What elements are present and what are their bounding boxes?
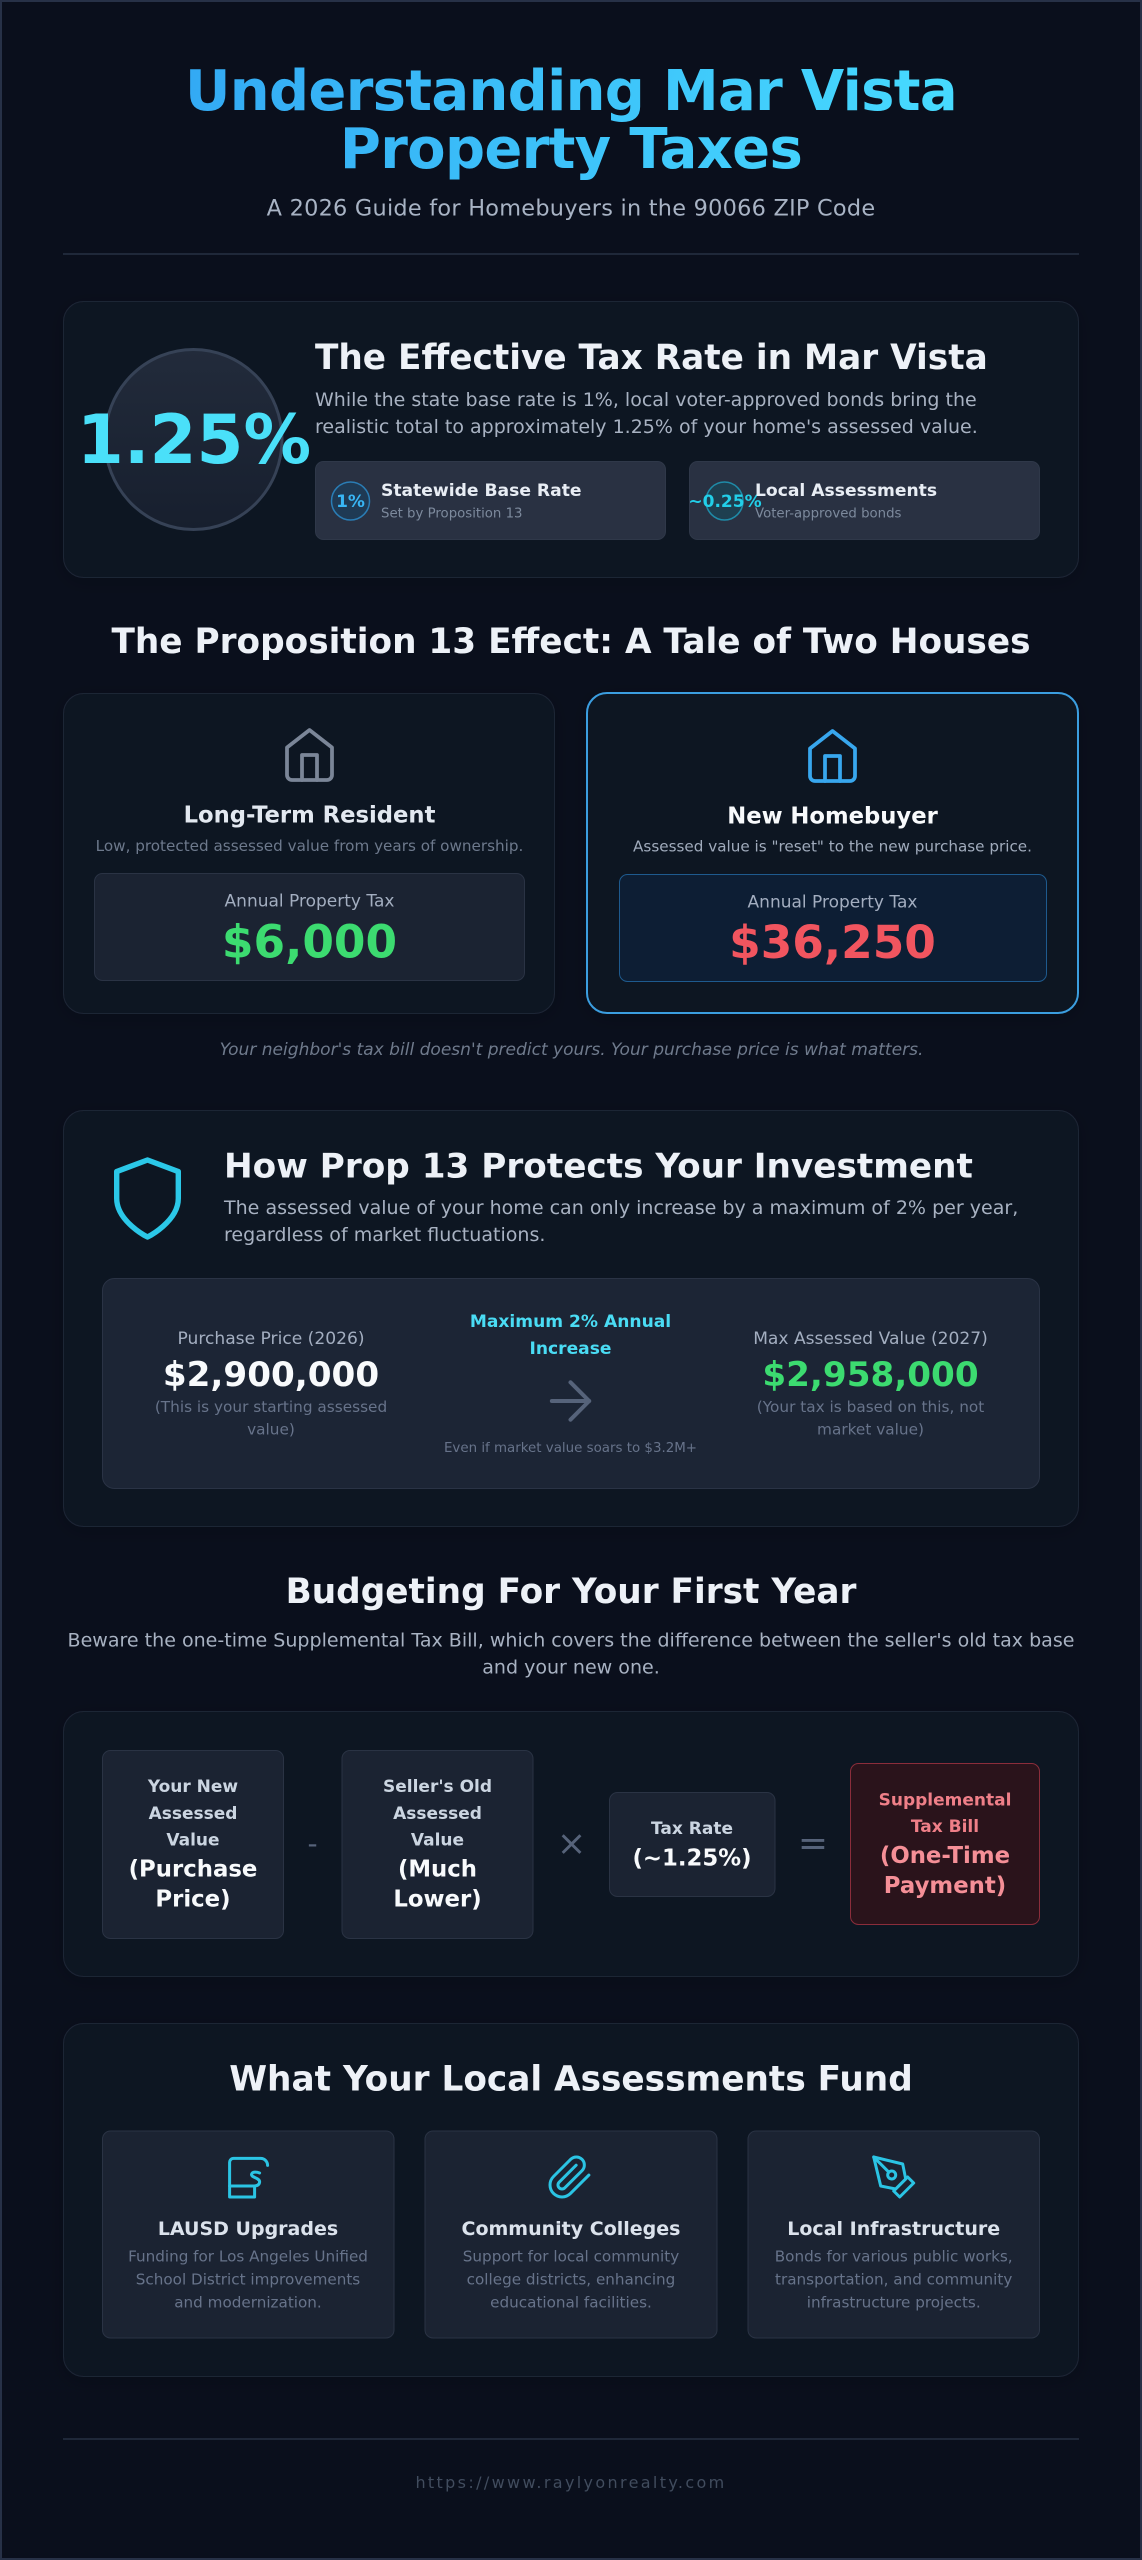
card: local infrastructure: infrastructure projects. <box>807 2293 981 2311</box>
tax amount box: Annual Property Tax <box>748 893 917 913</box>
box: old assessed value <box>342 1750 533 1938</box>
title: Understanding Mar Vista <box>185 59 957 124</box>
label: New Homebuyer <box>727 804 939 830</box>
icon: paperclip <box>548 2156 590 2198</box>
box: old assessed value: (Much <box>398 1857 477 1883</box>
box: old assessed value: Seller's Old <box>383 1777 492 1797</box>
card: statewide base rate: Set by Proposition 13 <box>381 506 523 522</box>
purchase price: (This is your starting assessed <box>155 1398 387 1416</box>
purchase price: value) <box>247 1420 295 1438</box>
purchase price: $2,900,000 <box>163 1355 379 1395</box>
minus operator: - <box>307 1827 318 1860</box>
budgeting description <box>68 1630 1074 1678</box>
box: new assessed value <box>102 1750 284 1938</box>
card: LAUSD upgrades: and modernization. <box>174 2293 322 2311</box>
annual increase: Maximum 2% Annual <box>470 1312 671 1332</box>
box: supplemental bill: (One-Time <box>880 1843 1010 1869</box>
max assessed value: $2,958,000 <box>762 1355 979 1395</box>
equals operator: = <box>798 1823 828 1864</box>
card: statewide base rate: 1% <box>336 492 365 512</box>
max assessed value: Max Assessed Value (2027) <box>753 1329 988 1349</box>
box: new assessed value: Assessed <box>149 1804 237 1824</box>
footer url: https://www.raylyonrealty.com <box>415 2473 727 2492</box>
box: supplemental bill: Tax Bill <box>911 1817 979 1837</box>
box: supplemental bill: Payment) <box>884 1873 1006 1899</box>
title <box>185 59 957 182</box>
card: LAUSD upgrades <box>102 2131 394 2338</box>
label: Long-Term Resident <box>184 803 436 829</box>
icon: scroll <box>228 2156 270 2198</box>
panel: supplemental formula <box>64 1712 1078 1976</box>
rate circle <box>77 350 311 530</box>
panel: effective tax rate <box>64 302 1078 578</box>
box: new assessed value: Value <box>166 1831 220 1851</box>
description: Assessed value is "reset" to the new purchase price. <box>633 838 1032 856</box>
box: supplemental bill <box>850 1764 1040 1924</box>
description: The assessed value of your home can only increase by a maximum of 2% per year, <box>223 1197 1018 1219</box>
heading: budgeting: Budgeting For Your First Year <box>286 1572 856 1612</box>
subtitle: A 2026 Guide for Homebuyers in the 90066 ZIP Code <box>267 196 875 222</box>
purchase price <box>155 1329 387 1438</box>
max assessed value: (Your tax is based on this, not <box>757 1398 984 1416</box>
box: new assessed value: (Purchase <box>129 1857 257 1883</box>
note: Your neighbor's tax bill doesn't predict yours. Your purchase price is what matters. <box>220 1040 923 1060</box>
header <box>63 59 1079 255</box>
box: old assessed value: Assessed <box>393 1804 482 1824</box>
card: community colleges: college districts, enhancing <box>467 2270 675 2288</box>
card: community colleges: educational facilities. <box>490 2293 652 2311</box>
icon: house <box>285 728 334 782</box>
description <box>315 389 978 438</box>
card: community colleges: Support for local community <box>463 2248 679 2266</box>
card: local assessments: ~0.25% <box>688 492 762 512</box>
box: new assessed value: Your New <box>147 1777 238 1797</box>
heading: proposition 13 effect: The Proposition 13 Effect: A Tale of Two Houses <box>111 622 1031 662</box>
max assessed value: market value) <box>817 1420 924 1438</box>
card: statewide base rate: Statewide Base Rate <box>381 481 582 501</box>
heading: How Prop 13 Protects Your Investment <box>224 1147 973 1187</box>
tax amount box: $36,250 <box>729 916 936 969</box>
box: old assessed value: Lower) <box>393 1887 482 1913</box>
icon: shield <box>114 1157 181 1240</box>
card: local infrastructure: transportation, and community <box>775 2270 1012 2288</box>
arrow <box>550 1380 592 1422</box>
card: community colleges <box>425 2131 717 2338</box>
card: community colleges: Community Colleges <box>462 2218 680 2240</box>
card: local assessments: Local Assessments <box>755 481 937 501</box>
description: While the state base rate is 1%, local voter-approved bonds bring the <box>315 389 977 411</box>
box: tax rate: (~1.25%) <box>632 1846 752 1872</box>
times operator: × <box>557 1824 586 1864</box>
icon: house <box>808 729 857 783</box>
panel: local assessments fund <box>64 2024 1078 2376</box>
purchase price: Purchase Price (2026) <box>177 1329 365 1349</box>
value comparison box <box>102 1278 1040 1488</box>
card: LAUSD upgrades: Funding for Los Angeles Unified <box>128 2248 368 2266</box>
box: old assessed value: Value <box>411 1831 464 1851</box>
card: local infrastructure: Local Infrastructure <box>787 2218 1000 2240</box>
card: statewide base rate <box>316 462 666 540</box>
card: local infrastructure <box>748 2131 1040 2338</box>
tax amount box <box>94 874 524 980</box>
icon: pen tool <box>872 2155 916 2199</box>
card: local infrastructure: Bonds for various public works, <box>775 2248 1013 2266</box>
annual increase: Increase <box>530 1339 612 1359</box>
description <box>223 1197 1018 1246</box>
tax amount box: $6,000 <box>222 915 397 968</box>
box: tax rate <box>610 1792 775 1896</box>
card: local assessments <box>688 462 1040 540</box>
card: LAUSD upgrades: LAUSD Upgrades <box>158 2218 338 2240</box>
box: tax rate: Tax Rate <box>651 1819 733 1839</box>
heading: What Your Local Assessments Fund <box>229 2060 913 2100</box>
box: new assessed value: Price) <box>155 1887 231 1913</box>
panel: long-term resident <box>64 694 554 1014</box>
heading: The Effective Tax Rate in Mar Vista <box>315 338 988 378</box>
description: realistic total to approximately 1.25% of your home's assessed value. <box>315 416 978 438</box>
max assessed value <box>753 1329 988 1438</box>
annual increase <box>444 1312 697 1456</box>
annual increase: Even if market value soars to $3.2M+ <box>444 1441 697 1456</box>
tax amount box: Annual Property Tax <box>225 892 394 912</box>
budgeting description: Beware the one-time Supplemental Tax Bill, which covers the difference between the seller's old tax base <box>68 1630 1074 1652</box>
card: LAUSD upgrades: School District improvements <box>136 2270 360 2288</box>
panel: prop 13 protection <box>64 1110 1078 1526</box>
tax amount box <box>620 874 1046 982</box>
card: local assessments: Voter-approved bonds <box>755 506 902 522</box>
panel: new homebuyer <box>587 693 1078 1013</box>
rate circle: 1.25% <box>77 400 311 479</box>
budgeting description: and your new one. <box>482 1656 660 1678</box>
description: regardless of market fluctuations. <box>224 1224 545 1246</box>
description: Low, protected assessed value from years of ownership. <box>96 837 523 855</box>
title: Property Taxes <box>340 117 802 182</box>
box: supplemental bill: Supplemental <box>879 1791 1011 1811</box>
